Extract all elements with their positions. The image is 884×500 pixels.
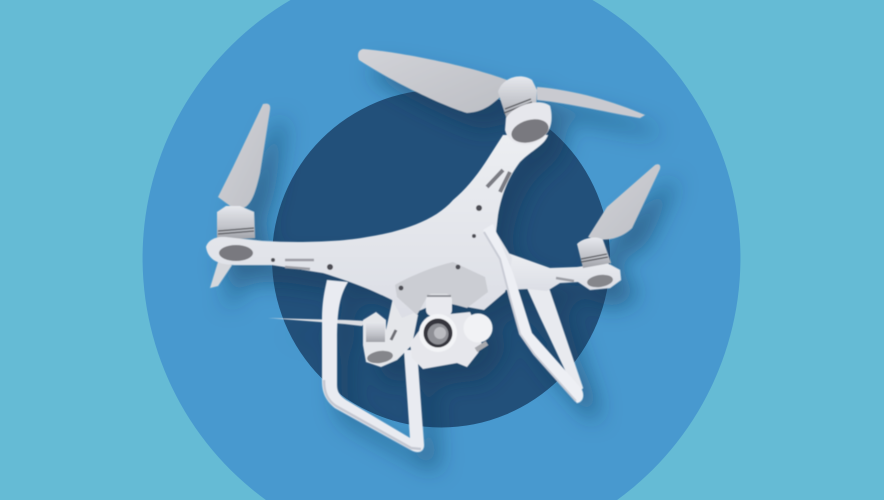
drone (206, 49, 660, 452)
top propeller blade thin (537, 87, 645, 118)
left motor rings (218, 228, 254, 234)
rear propeller thin blade (268, 318, 366, 326)
plate screws (399, 265, 460, 290)
screw holes (271, 205, 482, 270)
right propeller blade (588, 164, 660, 240)
left propeller blade top (218, 104, 270, 208)
left motor (217, 206, 255, 240)
arm vents (487, 170, 510, 192)
left leg (322, 280, 424, 452)
inner navy circle (272, 90, 610, 428)
right leg front (483, 224, 583, 403)
outer blue circle (143, 0, 740, 500)
right leg rear strut (527, 288, 583, 394)
belly plate (395, 262, 488, 315)
left propeller blade lower (210, 262, 232, 288)
top motor housing (498, 76, 551, 147)
left leg shading (324, 380, 421, 449)
camera gimbal (410, 294, 492, 369)
top propeller blade large (358, 49, 507, 113)
main body and arms (206, 135, 548, 318)
left motor lens (219, 245, 253, 261)
rear motor and arm (363, 298, 418, 367)
right motor and arm (505, 237, 621, 291)
right leg shading (484, 232, 576, 401)
